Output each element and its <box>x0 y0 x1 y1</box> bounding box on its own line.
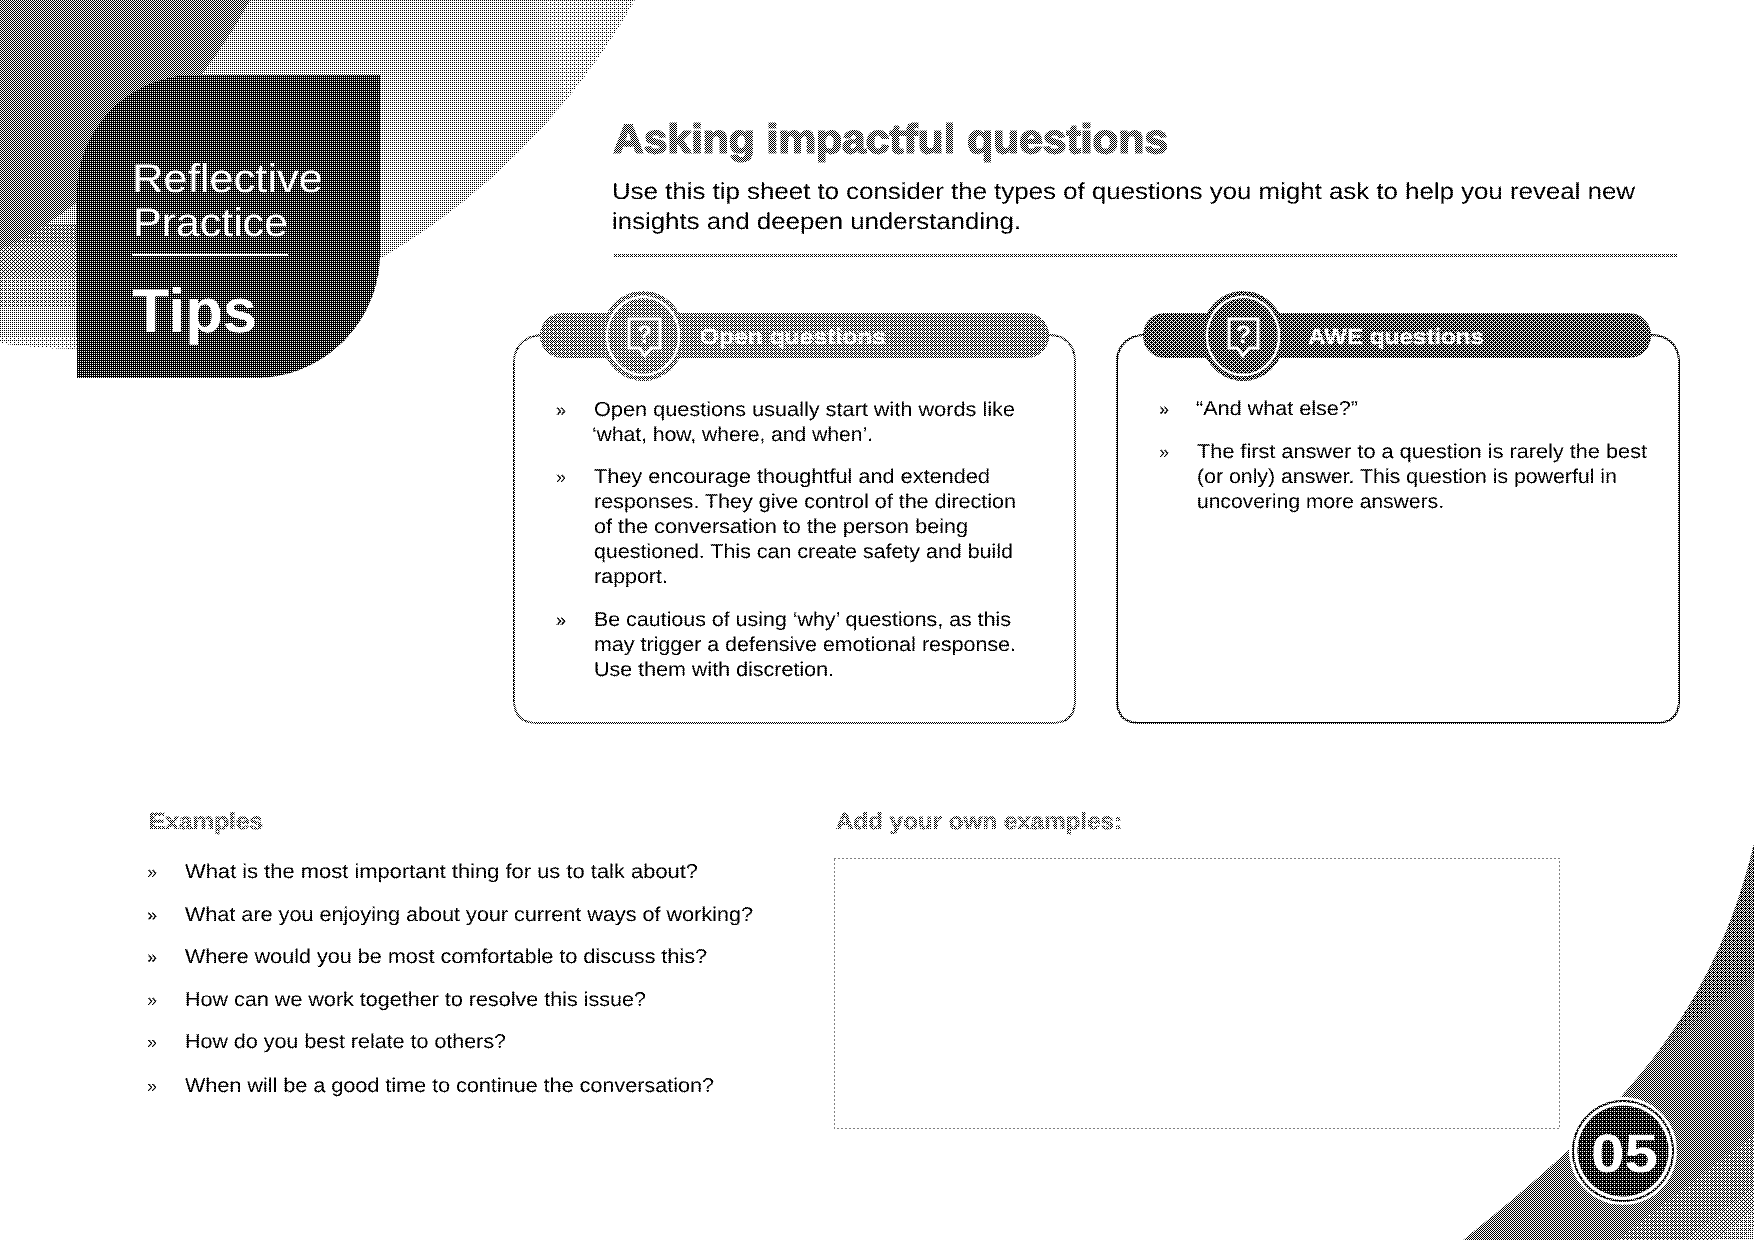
panel heading: Open questions <box>700 324 886 349</box>
bullet list: » <box>1159 399 1169 419</box>
card outline <box>1117 335 1679 723</box>
bullet list: responses. They give control of the direction <box>594 491 1016 513</box>
examples list <box>147 861 753 1097</box>
tab background <box>77 75 380 378</box>
bullet list: They encourage thoughtful and extended <box>594 466 990 488</box>
tab label: Tips: Tips <box>132 277 257 346</box>
examples list: » <box>147 947 157 967</box>
title: Asking impactful questions <box>613 116 1168 162</box>
bullet list: » <box>1159 442 1169 462</box>
bullet list: Open questions usually start with words like <box>594 399 1015 421</box>
examples list: Where would you be most comfortable to discuss this? <box>185 946 707 968</box>
decorative swoosh: bottom right <box>1463 843 1754 1240</box>
examples list: » <box>147 990 157 1010</box>
intro text: insights and deepen understanding. <box>612 208 1021 234</box>
examples list: What are you enjoying about your current ways of working? <box>185 904 753 926</box>
icon: question speech bubble: ? <box>637 321 652 349</box>
bullet list: “And what else?” <box>1196 398 1358 420</box>
intro text: Use this tip sheet to consider the types of questions you might ask to help you reveal new <box>612 178 1635 204</box>
examples list: How can we work together to resolve this issue? <box>185 989 646 1011</box>
examples list: What is the most important thing for us to talk about? <box>185 861 698 883</box>
card outline <box>514 335 1075 723</box>
examples list: » <box>147 1032 157 1052</box>
bullet list: » <box>556 400 566 420</box>
section heading: Add your own examples: <box>836 808 1122 834</box>
bullet list: Be cautious of using ‘why’ questions, as this <box>594 609 1011 631</box>
examples list: » <box>147 1076 157 1096</box>
examples list: » <box>147 905 157 925</box>
bullet list: Use them with discretion. <box>594 659 834 681</box>
examples heading: Examples <box>149 808 263 834</box>
bullet list <box>1159 398 1647 513</box>
tab heading <box>132 157 323 245</box>
bullet list: of the conversation to the person being <box>594 516 968 538</box>
bullet list: » <box>556 610 566 630</box>
examples list: How do you best relate to others? <box>185 1031 506 1053</box>
bullet list: may trigger a defensive emotional response. <box>594 634 1016 656</box>
bullet list: ‘what, how, where, and when’. <box>592 424 873 446</box>
bullet list: uncovering more answers. <box>1197 491 1444 513</box>
bullet list: questioned. This can create safety and build <box>594 541 1013 563</box>
tab heading: Reflective <box>132 157 323 201</box>
panel: AWE questions <box>1117 291 1679 723</box>
add your own examples section <box>834 808 1560 1128</box>
header pill <box>1143 313 1651 358</box>
header pill <box>540 313 1049 358</box>
page number badge: 05 <box>1591 1124 1658 1184</box>
examples list: When will be a good time to continue the conversation? <box>185 1075 714 1097</box>
panel heading: AWE questions <box>1308 324 1484 349</box>
bullet list: (or only) answer. This question is powerful in <box>1197 466 1617 488</box>
intro text <box>612 178 1635 234</box>
page number badge <box>1569 1097 1677 1205</box>
bullet list: rapport. <box>594 566 668 588</box>
bullet list: » <box>556 467 566 487</box>
panel: open questions <box>514 291 1075 723</box>
decorative swoosh: top left <box>0 0 635 349</box>
icon: question speech bubble <box>1201 291 1285 381</box>
tab: Reflective Practice Tips <box>77 75 380 378</box>
examples list: » <box>147 862 157 882</box>
bullet list <box>556 399 1016 681</box>
bullet list: The first answer to a question is rarely the best <box>1197 441 1647 463</box>
examples section <box>147 808 753 1097</box>
icon: question speech bubble <box>601 291 685 381</box>
icon: question speech bubble: ? <box>1236 321 1251 349</box>
tab heading: Practice <box>133 201 288 245</box>
dotted notes box <box>834 858 1560 1128</box>
